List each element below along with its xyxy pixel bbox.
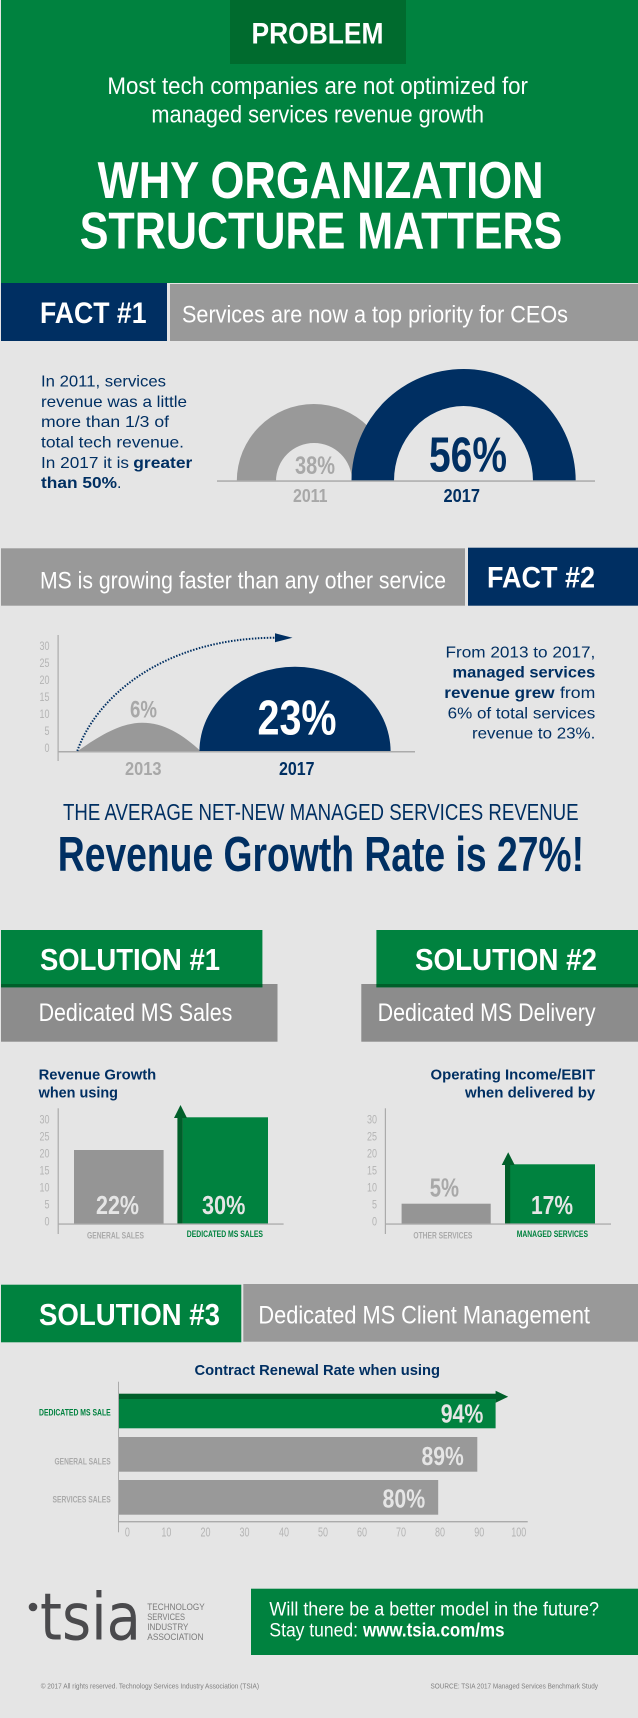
problem badge bbox=[230, 0, 406, 64]
y axis labels: 0 bbox=[44, 1216, 50, 1228]
logo: TSIA bbox=[29, 1580, 205, 1656]
x axis labels: 80 bbox=[435, 1526, 445, 1540]
x axis labels: 30 bbox=[240, 1526, 250, 1540]
chart: revenue growth by sales model bbox=[38, 1067, 284, 1240]
bar: dedicated MS sales: 30% bbox=[202, 1190, 245, 1220]
bar: dedicated MS sale: DEDICATED MS SALE bbox=[39, 1408, 111, 1418]
bar: services sales bbox=[52, 1480, 438, 1515]
chart: operating income by delivery bbox=[367, 1067, 611, 1240]
arrow: growth trend bbox=[77, 633, 292, 751]
text block: fact 1 description: more than 1/3 of bbox=[41, 414, 170, 431]
bar: other services bbox=[402, 1173, 491, 1240]
chart title: when delivered by bbox=[464, 1086, 595, 1102]
x axis labels: 60 bbox=[357, 1526, 367, 1540]
bar: general sales bbox=[54, 1437, 477, 1472]
text block: fact 2 description: revenue grew bbox=[444, 685, 555, 702]
bar: dedicated MS sale: 94% bbox=[441, 1399, 483, 1429]
hump: 2013 6%: 6% bbox=[130, 696, 157, 723]
arc: 2017 56%: 56% bbox=[429, 428, 507, 482]
callout: stay tuned: www.tsia.com/ms bbox=[362, 1621, 504, 1642]
bar: managed services: MANAGED SERVICES bbox=[517, 1229, 588, 1239]
footer: source: SOURCE: TSIA 2017 Managed Services Benchmark Study bbox=[430, 1681, 598, 1690]
y axis labels: 15 bbox=[40, 692, 50, 704]
panel: fact 1 heading: FACT #1 bbox=[40, 297, 146, 330]
x axis labels: 70 bbox=[396, 1526, 406, 1540]
y axis labels: 20 bbox=[40, 1148, 50, 1160]
panel: solution 3 heading bbox=[1, 1284, 638, 1342]
bar: other services: OTHER SERVICES bbox=[413, 1230, 472, 1240]
text block: fact 2 description: 6% of total services bbox=[448, 705, 595, 722]
bar: general sales: 22% bbox=[96, 1190, 139, 1220]
x axis labels: 10 bbox=[161, 1526, 171, 1540]
text block: fact 2 description: managed services bbox=[452, 665, 595, 682]
logo wordmark: ASSOCIATION bbox=[147, 1632, 204, 1642]
arc: 2011 38%: 2011 bbox=[293, 485, 328, 506]
text block: fact 1 description: . bbox=[117, 475, 121, 492]
text block: fact 2 description: from bbox=[560, 685, 595, 702]
bar: general sales: GENERAL SALES bbox=[87, 1230, 144, 1240]
y axis labels bbox=[40, 641, 50, 755]
x axis labels: 100 bbox=[511, 1526, 526, 1540]
x axis labels: 90 bbox=[474, 1526, 484, 1540]
y axis labels: 0 bbox=[44, 743, 50, 755]
bar: services sales: SERVICES SALES bbox=[52, 1495, 111, 1505]
text block: fact 1 description: total tech revenue. bbox=[41, 434, 184, 452]
footer: copyright: © 2017 All rights reserved. Technology Services Industry Association (TSIA) bbox=[41, 1681, 259, 1690]
arrow: right bbox=[118, 1391, 508, 1403]
x axis labels: 40 bbox=[279, 1526, 289, 1540]
bar: general sales: GENERAL SALES bbox=[54, 1456, 111, 1466]
text block: fact 2 description: revenue to 23%. bbox=[472, 726, 595, 743]
y axis labels: 20 bbox=[367, 1148, 377, 1160]
text block: fact 1 description: In 2011, services bbox=[41, 373, 166, 390]
y axis labels: 10 bbox=[40, 709, 50, 721]
chart title bbox=[38, 1067, 156, 1102]
y axis labels: 30 bbox=[367, 1114, 377, 1126]
x axis labels: 20 bbox=[200, 1526, 211, 1540]
y axis labels: 10 bbox=[40, 1182, 50, 1194]
chart title: when using bbox=[38, 1086, 118, 1102]
text block: fact 1 description: greater bbox=[133, 455, 192, 472]
chart: contract renewal rate bbox=[39, 1362, 528, 1540]
panel: solution 2 heading bbox=[361, 930, 638, 1042]
y axis labels: 25 bbox=[367, 1131, 377, 1143]
bar: dedicated MS sales bbox=[183, 1117, 268, 1239]
arc: 2011 38%: 38% bbox=[295, 452, 335, 480]
panel: fact 1 heading bbox=[1, 283, 638, 341]
hump: 2013 6% bbox=[77, 696, 201, 779]
y axis labels: 25 bbox=[40, 658, 50, 670]
problem statement bbox=[107, 73, 528, 128]
text block: fact 1 description: than 50% bbox=[41, 475, 117, 492]
problem statement: Most tech companies are not optimized for bbox=[107, 73, 528, 100]
dome: 2017 23%: 2017 bbox=[279, 758, 314, 779]
chart: managed services growth bbox=[40, 633, 415, 779]
y axis labels: 5 bbox=[44, 726, 50, 738]
x axis labels: 50 bbox=[318, 1526, 328, 1540]
x axis labels bbox=[125, 1526, 526, 1540]
dome: 2017 23%: 23% bbox=[258, 691, 336, 745]
y axis labels bbox=[40, 1114, 50, 1228]
panel: solution 3 heading: Dedicated MS Client Management bbox=[258, 1302, 590, 1329]
chart title: Revenue Growth bbox=[39, 1067, 156, 1083]
panel: solution 1 heading: Dedicated MS Sales bbox=[39, 1000, 232, 1027]
callout: revenue growth rate bbox=[58, 799, 584, 882]
panel: solution 2 heading: SOLUTION #2 bbox=[415, 942, 597, 977]
y axis labels: 5 bbox=[372, 1199, 377, 1211]
y axis labels: 30 bbox=[40, 641, 50, 653]
logo wordmark: SERVICES bbox=[147, 1612, 185, 1622]
bar: other services: 5% bbox=[430, 1173, 459, 1203]
arc: 2017 56%: 2017 bbox=[444, 485, 480, 506]
panel: solution 2 heading: Dedicated MS Delivery bbox=[378, 1000, 596, 1027]
logo wordmark bbox=[147, 1602, 205, 1642]
y axis labels: 15 bbox=[367, 1165, 377, 1177]
panel: fact 2 heading bbox=[1, 548, 638, 606]
logo wordmark: INDUSTRY bbox=[147, 1622, 188, 1632]
panel: fact 1 heading: Services are now a top priority for CEOs bbox=[182, 302, 568, 328]
bar: general sales: 89% bbox=[422, 1441, 464, 1471]
problem statement: managed services revenue growth bbox=[151, 102, 484, 128]
arc: 2017 56% bbox=[352, 369, 576, 506]
text block: fact 1 description: In 2017 it is bbox=[41, 455, 129, 472]
chart title: Contract Renewal Rate when using bbox=[194, 1362, 440, 1379]
bar: managed services: 17% bbox=[531, 1190, 573, 1220]
bar: services sales: 80% bbox=[382, 1484, 425, 1514]
y axis labels: 10 bbox=[367, 1182, 377, 1194]
bar: general sales bbox=[74, 1150, 164, 1240]
logo wordmark: TECHNOLOGY bbox=[147, 1602, 205, 1612]
y axis labels: 25 bbox=[40, 1131, 50, 1143]
text block: fact 2 description bbox=[444, 644, 595, 743]
text block: fact 1 description bbox=[41, 373, 192, 492]
y axis labels: 0 bbox=[372, 1216, 377, 1228]
text block: fact 1 description: revenue was a little bbox=[41, 394, 187, 411]
problem badge: PROBLEM bbox=[252, 18, 384, 51]
callout: stay tuned: Stay tuned: bbox=[269, 1621, 358, 1642]
y axis labels: 5 bbox=[44, 1199, 50, 1211]
panel: fact 2 heading: MS is growing faster than any other service bbox=[40, 567, 446, 594]
y axis labels: 30 bbox=[40, 1114, 50, 1126]
y axis labels: 20 bbox=[40, 675, 50, 687]
arc: 2011 38% bbox=[237, 404, 391, 506]
panel: problem header bbox=[1, 0, 638, 283]
callout: stay tuned bbox=[251, 1589, 638, 1655]
dome: 2017 23% bbox=[199, 667, 391, 779]
chart title bbox=[430, 1067, 595, 1102]
chart title: Operating Income/EBIT bbox=[430, 1067, 595, 1083]
hump: 2013 6%: 2013 bbox=[125, 758, 162, 779]
panel: solution 1 heading bbox=[1, 930, 278, 1042]
panel: solution 1 heading: SOLUTION #1 bbox=[40, 942, 220, 977]
bar: dedicated MS sales: DEDICATED MS SALES bbox=[187, 1229, 263, 1239]
bar: managed services bbox=[510, 1164, 595, 1239]
text block: fact 2 description: From 2013 to 2017, bbox=[446, 644, 595, 661]
arrow: up bbox=[502, 1152, 515, 1224]
y axis labels: 15 bbox=[40, 1165, 50, 1177]
arrow: up bbox=[174, 1105, 187, 1224]
panel: fact 2 heading: FACT #2 bbox=[487, 562, 595, 595]
chart: services share arcs bbox=[217, 369, 595, 506]
panel: solution 3 heading: SOLUTION #3 bbox=[39, 1297, 220, 1332]
title: WHY ORGANIZATION bbox=[98, 152, 544, 210]
title bbox=[80, 152, 562, 261]
logo: TSIA: tsia bbox=[40, 1580, 141, 1656]
x axis labels: 0 bbox=[125, 1526, 130, 1540]
bar: dedicated MS sale bbox=[39, 1399, 496, 1429]
y axis labels bbox=[367, 1114, 377, 1228]
callout: stay tuned: Will there be a better model in the future? bbox=[269, 1600, 599, 1621]
